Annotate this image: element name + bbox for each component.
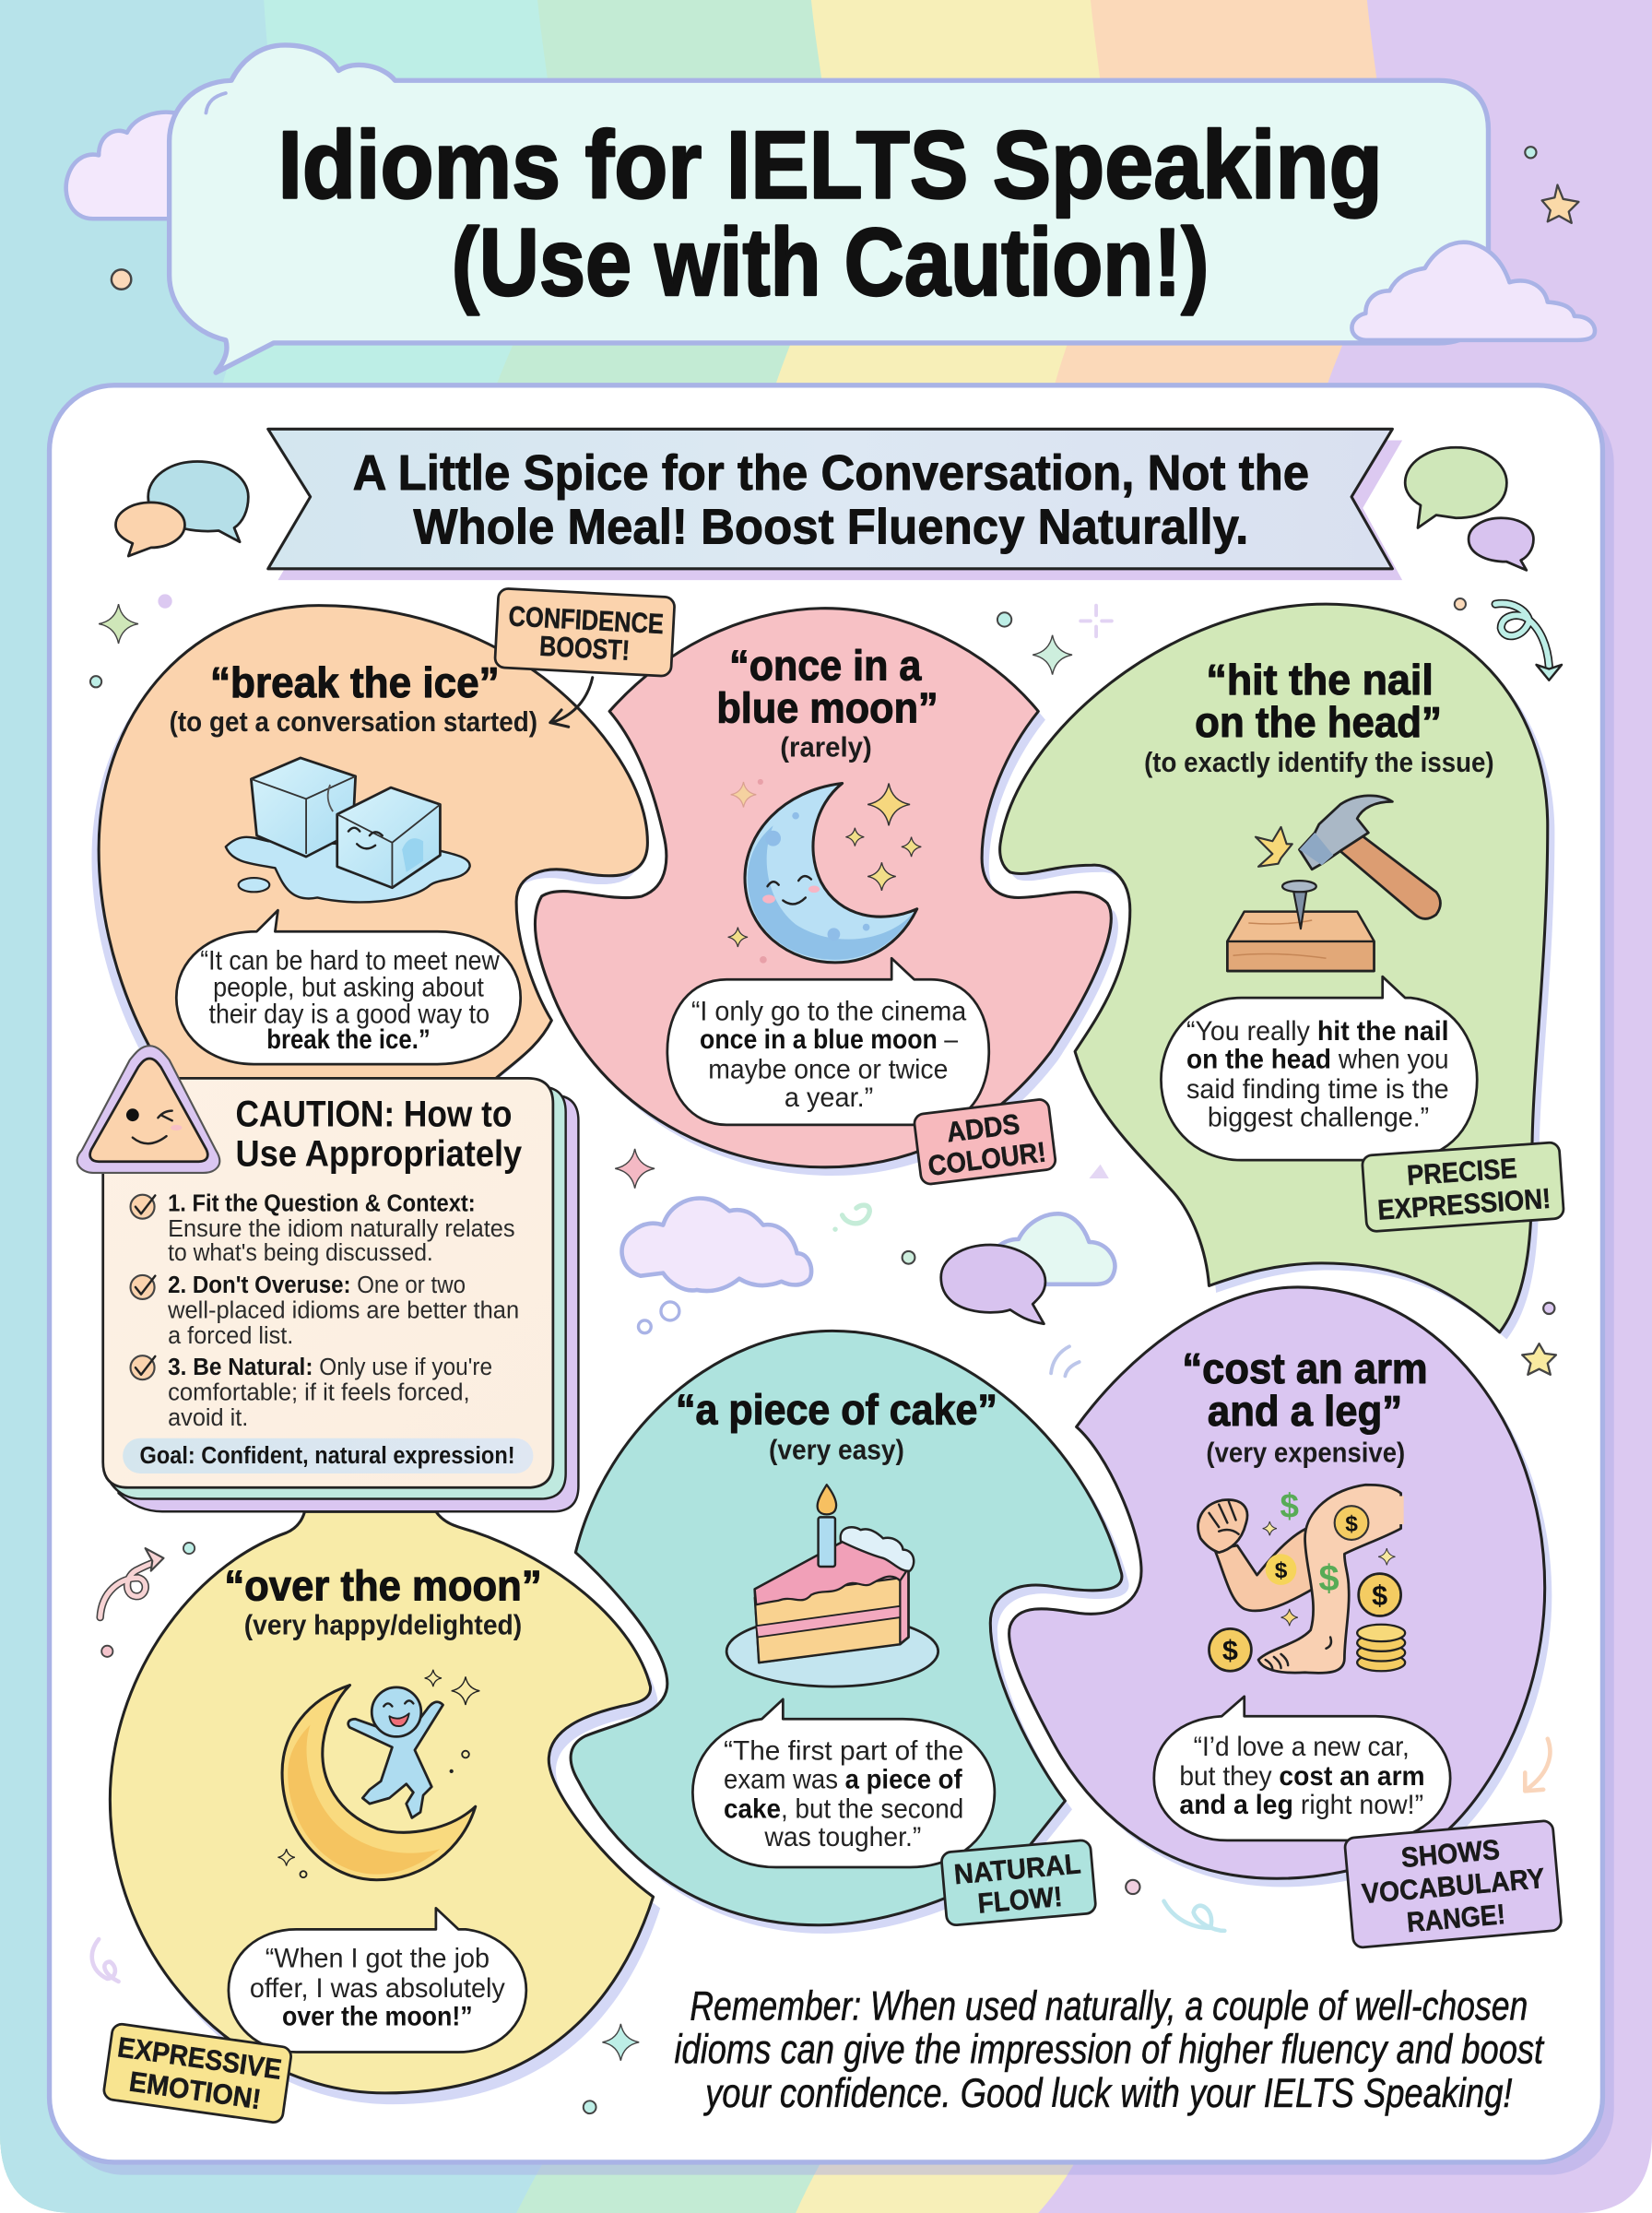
quote bubble: and a leg right now!”: [1179, 1790, 1423, 1820]
icon: arm, leg and coins: $: [1275, 1558, 1288, 1583]
heading: [170, 658, 537, 738]
tag: precise expression: [1362, 1142, 1564, 1232]
quote bubble: [229, 1908, 526, 2053]
icon: arm, leg and coins: $: [1345, 1512, 1358, 1537]
heading: “hit the nail: [1206, 656, 1434, 704]
card: break the ice: [91, 588, 675, 1095]
heading: [676, 1385, 997, 1466]
heading: (very easy): [769, 1435, 904, 1466]
title text: [277, 112, 1383, 316]
icon: winking warning triangle: [77, 1046, 219, 1173]
rule 3: comfortable; if it feels forced,: [168, 1378, 470, 1405]
title text: (Use with Caution!): [452, 209, 1209, 316]
icon: person jumping on crescent moon: [277, 1670, 479, 1880]
subtitle ribbon banner: A Little Spice for the Conversation, Not the: [353, 446, 1309, 501]
tag: expressive emotion: [103, 2023, 292, 2124]
quote bubble: break the ice.”: [266, 1024, 431, 1055]
caution heading: CAUTION: How to: [236, 1094, 513, 1134]
tag: expressive emotion: EXPRESSIVE: [115, 2031, 284, 2086]
heading: blue moon”: [716, 684, 938, 732]
icon: teal curly arrow: [1495, 604, 1562, 680]
quote bubble: but they cost an arm: [1179, 1761, 1425, 1792]
small decor around title: [112, 147, 1578, 290]
icon: arm, leg and coins: $: [1222, 1635, 1238, 1666]
card: cost an arm and a leg: [1009, 1287, 1562, 1948]
caution panel: [77, 1046, 578, 1511]
quote bubble: people, but asking about: [213, 973, 485, 1003]
quote bubble: exam was a piece of: [724, 1764, 962, 1794]
main white panel: [50, 385, 1614, 2175]
quote bubble: “I’d love a new car,: [1194, 1732, 1410, 1762]
heading: (very expensive): [1206, 1438, 1405, 1469]
tag: confidence boost: [495, 588, 675, 677]
rule 1: Ensure the idiom naturally relates: [168, 1214, 515, 1242]
rule 1: 1. Fit the Question & Context:: [168, 1189, 476, 1216]
tag: natural flow: FLOW!: [976, 1881, 1064, 1920]
icon: smiling blue moon: [728, 779, 921, 964]
heading: “once in a: [729, 642, 922, 690]
arrow: tag to heading: [550, 678, 593, 727]
cloud: right of title: [1351, 243, 1595, 340]
heading: [1182, 1344, 1428, 1469]
heading: and a leg”: [1208, 1387, 1402, 1435]
tag: shows vocabulary range: [1344, 1820, 1562, 1948]
cloud: mint centre-right: [987, 1213, 1115, 1284]
heading: “cost an arm: [1182, 1344, 1428, 1392]
title speech bubble: [66, 45, 1595, 373]
icon: pink curly arrow: [100, 1548, 164, 1617]
quote bubble: offer, I was absolutely: [250, 1973, 505, 2004]
caution heading: [236, 1094, 522, 1174]
tag: confidence boost: BOOST!: [538, 631, 631, 667]
tag: precise expression: PRECISE: [1406, 1153, 1518, 1191]
quote bubble: [1154, 1697, 1450, 1840]
heading: [224, 1562, 542, 1640]
quote bubble: “I only go to the cinema: [691, 997, 967, 1027]
closing remember note: [674, 1983, 1545, 2116]
title text: Idioms for IELTS Speaking: [277, 112, 1383, 219]
quote bubble: said finding time is the: [1186, 1074, 1449, 1105]
quote bubble: biggest challenge.”: [1208, 1102, 1429, 1132]
card: once in a blue moon: [535, 609, 1118, 1185]
quote bubble: [667, 958, 989, 1125]
rule 3: avoid it.: [168, 1403, 248, 1431]
tag: natural flow: NATURAL: [953, 1848, 1082, 1890]
icon: hammer and nail: [1227, 796, 1440, 971]
rule 3: 3. Be Natural: Only use if you're: [168, 1353, 492, 1380]
heading: on the head”: [1195, 698, 1442, 746]
quote bubble: [1161, 976, 1477, 1160]
rule 2: well-placed idioms are better than: [167, 1296, 519, 1324]
icon: arm, leg and coins: $: [1372, 1580, 1387, 1611]
goal pill: Goal: Confident, natural expression!: [140, 1441, 515, 1469]
tag: shows vocabulary range: SHOWS: [1400, 1834, 1501, 1874]
tag: shows vocabulary range: RANGE!: [1406, 1899, 1506, 1938]
heading: (to exactly identify the issue): [1144, 747, 1494, 778]
heading: [1144, 656, 1494, 778]
rule 2: 2. Don't Overuse: One or two: [168, 1271, 466, 1298]
quote bubble: maybe once or twice: [708, 1054, 948, 1084]
quote bubble: [692, 1699, 995, 1867]
quote bubble: cake, but the second: [724, 1793, 963, 1824]
tag: natural flow: [941, 1840, 1096, 1926]
icon: melting ice cubes: [226, 758, 470, 902]
icon: arm, leg and coins: $: [1280, 1486, 1299, 1524]
icon: arm, leg and coins: [1198, 1485, 1405, 1673]
icon: arm, leg and coins: $: [1318, 1558, 1339, 1599]
tag: shows vocabulary range: VOCABULARY: [1361, 1863, 1546, 1910]
card: a piece of cake: [571, 1331, 1129, 1934]
quote bubble: “When I got the job: [266, 1944, 490, 1974]
heading: “break the ice”: [210, 658, 500, 706]
heading: “a piece of cake”: [676, 1385, 997, 1433]
quote bubble: “The first part of the: [724, 1736, 963, 1767]
heading: (rarely): [780, 731, 872, 763]
quote bubble: on the head when you: [1186, 1045, 1449, 1075]
speech bubbles left of banner: [115, 462, 248, 556]
quote bubble: a year.”: [785, 1083, 873, 1113]
subtitle ribbon banner: Whole Meal! Boost Fluency Naturally.: [413, 500, 1248, 554]
caution heading: Use Appropriately: [236, 1133, 522, 1174]
card: hit the nail on the head: [1000, 604, 1564, 1340]
subtitle ribbon banner: [268, 429, 1402, 580]
cloud: left behind title: [66, 112, 175, 219]
quote bubble: over the moon!”: [282, 2001, 473, 2031]
speech bubbles right of banner: [1405, 447, 1533, 570]
rule 2: [131, 1271, 519, 1349]
card: over the moon: [103, 1511, 660, 2124]
tag: adds colour: [914, 1098, 1056, 1185]
quote bubble: “It can be hard to meet new: [200, 946, 500, 976]
speech bubble: lavender centre-right: [941, 1245, 1045, 1324]
quote bubble: “You really hit the nail: [1186, 1016, 1449, 1047]
tag: confidence boost: CONFIDENCE: [508, 600, 665, 640]
quote bubble: [176, 910, 521, 1064]
tag: adds colour: ADDS: [945, 1108, 1021, 1148]
quote bubble: their day is a good way to: [208, 1000, 490, 1030]
quote bubble: was tougher.”: [763, 1822, 921, 1852]
decorative sparkles and dots: [90, 594, 1556, 2113]
heading: “over the moon”: [224, 1562, 542, 1610]
tag: precise expression: EXPRESSION!: [1376, 1183, 1552, 1226]
tag: expressive emotion: EMOTION!: [127, 2066, 263, 2115]
quote bubble: once in a blue moon –: [700, 1024, 958, 1055]
rule 3: [131, 1353, 492, 1431]
heading: (very happy/delighted): [244, 1609, 522, 1640]
rule 1: to what's being discussed.: [168, 1238, 433, 1266]
rule 1: [131, 1189, 515, 1266]
icon: birthday cake slice: [726, 1485, 938, 1686]
heading: (to get a conversation started): [170, 706, 537, 738]
heading: [716, 642, 938, 763]
cloud: lavender centre: [622, 1198, 811, 1291]
rule 2: a forced list.: [168, 1321, 293, 1349]
tag: adds colour: COLOUR!: [926, 1136, 1048, 1182]
